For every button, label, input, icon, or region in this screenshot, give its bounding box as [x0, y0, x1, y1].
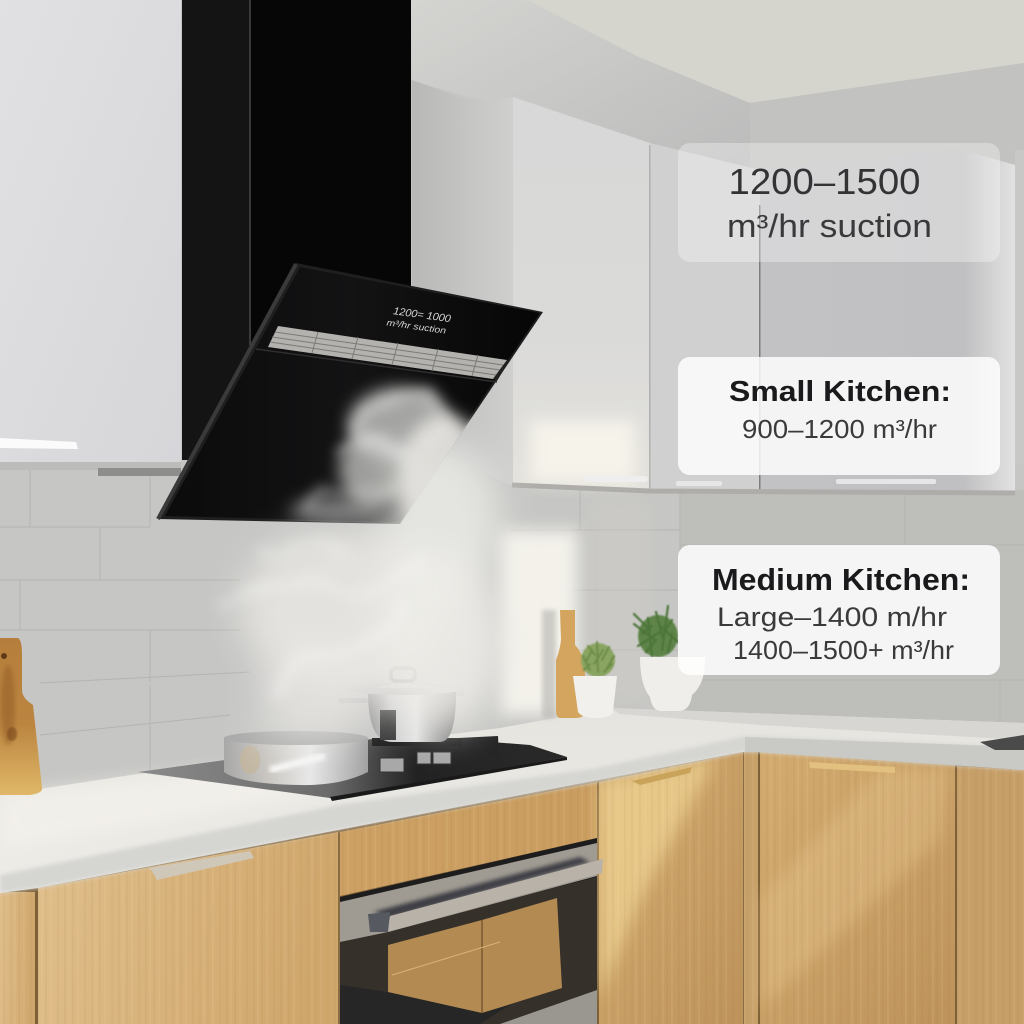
white bowl with plant [634, 606, 705, 711]
smoke on hood glass [284, 375, 474, 523]
panel: medium and large kitchen: Large–1400 m/hr [717, 602, 947, 632]
oven [340, 838, 603, 1024]
hood display label [386, 305, 452, 336]
panel: medium and large kitchen [678, 545, 1000, 675]
lower cabinets [0, 745, 1024, 1024]
rising steam [225, 440, 505, 748]
panel: small kitchen: 900–1200 m³/hr [742, 414, 937, 444]
range hood canopy [158, 263, 543, 524]
backsplash tiles [0, 465, 1024, 795]
small kitchen heading: Small Kitchen: [729, 376, 951, 408]
gas hob [138, 735, 567, 801]
range hood chimney [182, 0, 411, 460]
panel: overall suction: m³/hr suction [727, 208, 932, 244]
upper middle and right cabinets [412, 80, 1015, 493]
oven fascia [340, 843, 597, 942]
front pan [224, 731, 368, 785]
suction value: 1200–1500 [728, 161, 920, 202]
countertop [0, 708, 1024, 893]
back saucepan [338, 668, 464, 742]
oven handle [368, 859, 603, 932]
cutting board left [0, 638, 42, 795]
medium kitchen heading: Medium Kitchen: [712, 562, 970, 597]
cabinet handles [150, 762, 895, 880]
hood display label: 1200= 1000 [392, 305, 452, 325]
hood filter grille [268, 326, 509, 381]
white pot with plant [573, 642, 617, 718]
panel: medium and large kitchen: 1400–1500+ m³/hr [733, 635, 954, 665]
hood display label: m³/hr suction [386, 317, 447, 336]
panel: overall suction [678, 143, 1000, 262]
oven door reflection [388, 898, 562, 1013]
cutting board and plants on counter [542, 606, 705, 718]
panel: small kitchen [678, 357, 1000, 475]
upper left cabinet [0, 0, 181, 476]
